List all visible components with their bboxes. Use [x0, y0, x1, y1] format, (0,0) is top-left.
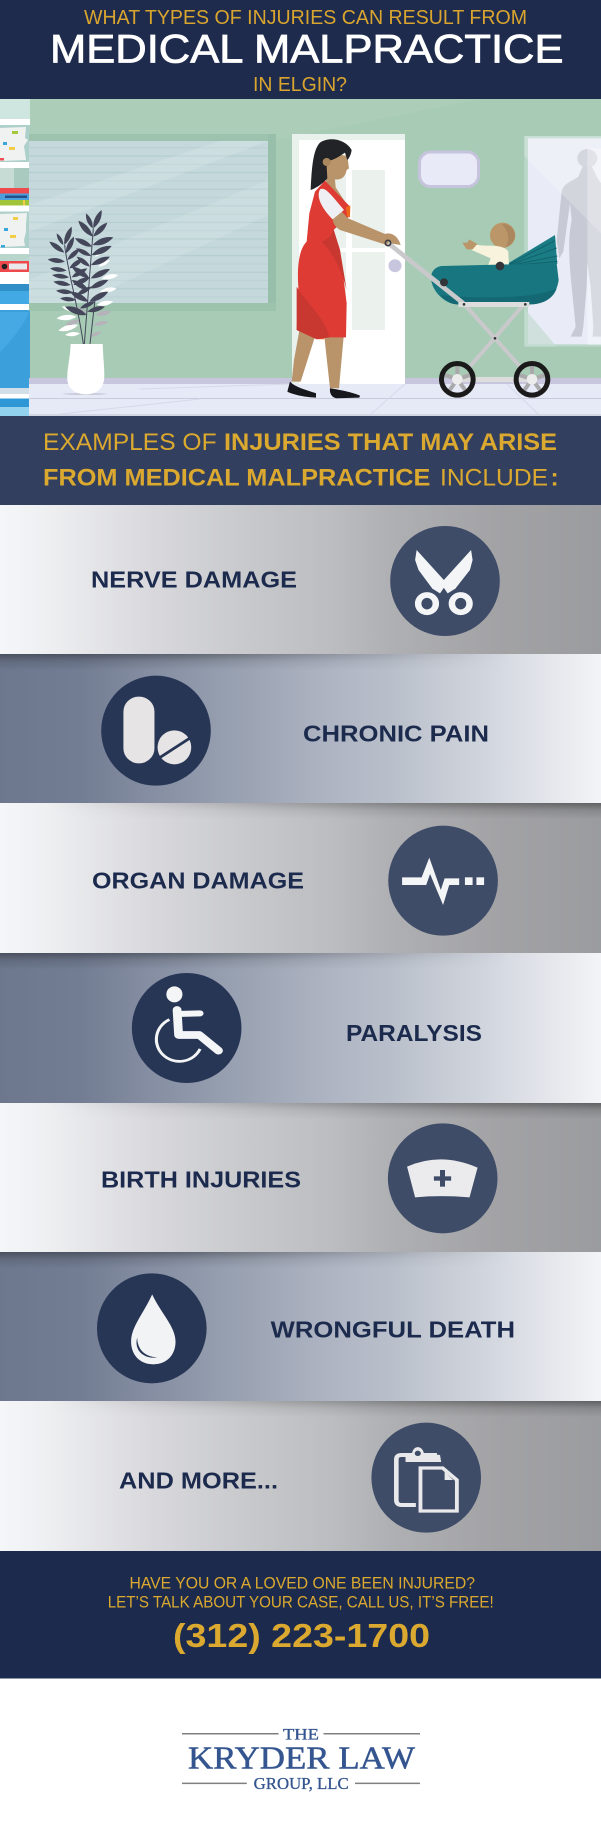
logo: The Kryder Law Group, LLC [182, 1726, 420, 1793]
row: paralysis [0, 953, 601, 1103]
sub-heading line 1: INJURIES THAT MAY ARISE [224, 429, 557, 456]
row: wrongful death [0, 1252, 601, 1401]
sub-heading line 2: FROM MEDICAL MALPRACTICE [43, 465, 430, 492]
illustration: hospital corridor [0, 99, 601, 416]
row: chronic pain [0, 654, 601, 803]
row: nerve damage [0, 505, 601, 654]
phone number: (312) 223-1700 [173, 1617, 430, 1654]
label: chronic pain: CHRONIC PAIN [303, 721, 489, 747]
label: birth injuries: BIRTH INJURIES [101, 1167, 301, 1193]
plant [47, 209, 119, 395]
wall sign [420, 152, 478, 186]
row: and more [0, 1401, 601, 1551]
icon: nurse cap [388, 1123, 498, 1233]
label: and more: AND MORE... [119, 1468, 278, 1494]
sub-heading line 2: : [550, 465, 559, 492]
woman pushing stroller [287, 139, 401, 398]
left shelving [0, 99, 30, 416]
icon: clipboard [371, 1423, 481, 1533]
sub-heading band [0, 416, 601, 505]
footer invitation: LET’S TALK ABOUT YOUR CASE, CALL US, IT’S FREE! [108, 1593, 494, 1611]
stroller and baby [385, 223, 559, 395]
logo: The Kryder Law Group, LLC: GROUP, LLC [254, 1774, 349, 1793]
row: birth injuries [0, 1103, 601, 1252]
heading line 3: IN ELGIN? [253, 74, 347, 96]
sub-heading line 1: EXAMPLES OF [43, 429, 217, 456]
header panel [0, 0, 601, 99]
logo: The Kryder Law Group, LLC: KRYDER LAW [188, 1740, 416, 1776]
icon: heartbeat [388, 826, 498, 936]
window with blinds [29, 134, 276, 311]
anatomy poster [524, 136, 601, 347]
label: organ damage: ORGAN DAMAGE [92, 868, 304, 894]
icon: drop [97, 1273, 207, 1383]
sub-heading line 1 [43, 429, 557, 456]
label: nerve damage: NERVE DAMAGE [91, 567, 297, 593]
row: organ damage [0, 803, 601, 953]
label: wrongful death: WRONGFUL DEATH [271, 1317, 515, 1343]
footer call to action [0, 1551, 601, 1678]
label: paralysis: PARALYSIS [346, 1020, 482, 1046]
icon: scissors [390, 526, 500, 636]
door [292, 134, 405, 384]
floor [29, 378, 601, 416]
wall [29, 99, 601, 384]
icon: wheelchair [132, 973, 241, 1083]
sub-heading line 2: INCLUDE [440, 465, 548, 492]
icon: pills [101, 676, 211, 786]
heading line 1: WHAT TYPES OF INJURIES CAN RESULT FROM [84, 6, 527, 29]
main title: MEDICAL MALPRACTICE [50, 28, 564, 72]
logo: The Kryder Law Group, LLC: THE [283, 1726, 319, 1743]
footer question: HAVE YOU OR A LOVED ONE BEEN INJURED? [130, 1574, 475, 1592]
